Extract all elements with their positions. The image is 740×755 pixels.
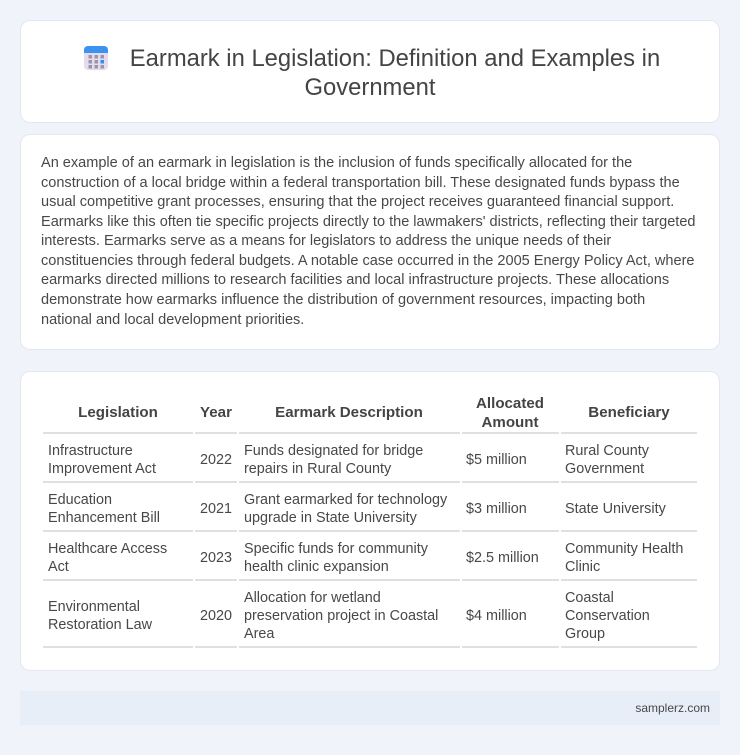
intro paragraph: interests. Earmarks serve as a means for legislators to address the unique needs of their (41, 233, 611, 249)
table row: Education Enhancement Bill: Enhancement Bill (48, 510, 160, 526)
intro paragraph: earmarks directed millions to research facilities and local infrastructure projects. These allocations (41, 272, 669, 288)
intro paragraph: demonstrate how earmarks influence the distribution of government resources, impacting both (41, 292, 645, 308)
table header row: Legislation (78, 404, 158, 421)
table row: Environmental Restoration Law: Restoration Law (48, 617, 152, 633)
panel: intro text card (20, 134, 720, 350)
table row: Environmental Restoration Law (43, 590, 697, 648)
table row: Infrastructure Improvement Act: $5 million (466, 452, 527, 468)
intro paragraph: constituencies through federal budgets. A notable case occurred in the 2005 Energy Policy Act, where (41, 252, 695, 268)
intro paragraph (41, 155, 696, 328)
table header row: Beneficiary (588, 404, 670, 421)
table row: Infrastructure Improvement Act: Improvement Act (48, 461, 156, 477)
table row: Infrastructure Improvement Act: Infrastructure (48, 443, 133, 459)
table row: Environmental Restoration Law: Area (244, 626, 274, 642)
table header row (43, 395, 697, 434)
table row: Environmental Restoration Law: Conservation (565, 608, 650, 624)
table row: Infrastructure Improvement Act (43, 443, 697, 483)
footer bar (20, 691, 720, 725)
table row: Environmental Restoration Law: preservation project in Coastal (244, 608, 438, 624)
table header row: Allocated (476, 395, 544, 412)
table row: Environmental Restoration Law: 2020 (200, 608, 232, 624)
table row: Environmental Restoration Law: Environmental (48, 599, 140, 615)
footer text: samplerz.com: samplerz.com (635, 701, 710, 715)
table row: Infrastructure Improvement Act: Funds designated for bridge (244, 443, 423, 459)
title (130, 45, 660, 101)
table row: Education Enhancement Bill: State University (565, 501, 666, 517)
table row: Education Enhancement Bill: upgrade in State University (244, 510, 417, 526)
table row: Environmental Restoration Law: Group (565, 626, 605, 642)
intro paragraph: usual competitive grant processes, ensuring that the project receives guaranteed financial support. (41, 194, 674, 210)
table row: Healthcare Access Act: $2.5 million (466, 550, 539, 566)
table row: Healthcare Access Act: Healthcare Access (48, 541, 167, 557)
table row: Healthcare Access Act (43, 541, 697, 581)
table row: Healthcare Access Act: 2023 (200, 550, 232, 566)
table row: Education Enhancement Bill: 2021 (200, 501, 232, 517)
title: Earmark in Legislation: Definition and Examples in (130, 45, 660, 72)
table row: Healthcare Access Act: Act (48, 559, 69, 575)
table row: Education Enhancement Bill (43, 492, 697, 532)
table row: Infrastructure Improvement Act: 2022 (200, 452, 232, 468)
intro paragraph: An example of an earmark in legislation is the inclusion of funds specifically allocated for the (41, 155, 632, 171)
table row: Healthcare Access Act: Specific funds for community (244, 541, 428, 557)
title: Government (305, 74, 435, 101)
table row: Healthcare Access Act: Community Health (565, 541, 683, 557)
intro paragraph: Earmarks like this often tie specific projects directly to the lawmakers' districts, reflecting their targeted (41, 214, 696, 230)
table row: Environmental Restoration Law: Allocation for wetland (244, 590, 381, 606)
table row: Environmental Restoration Law: Coastal (565, 590, 614, 606)
icon: calendar (84, 46, 108, 70)
table row: Infrastructure Improvement Act: Rural County (565, 443, 649, 459)
table header row: Earmark Description (275, 404, 423, 421)
panel: table card (20, 371, 720, 671)
table row: Healthcare Access Act: Clinic (565, 559, 600, 575)
intro paragraph: national and local development priorities. (41, 312, 304, 328)
table row: Education Enhancement Bill: Grant earmarked for technology (244, 492, 447, 508)
table row: Infrastructure Improvement Act: repairs in Rural County (244, 461, 391, 477)
table header row: Year (200, 404, 232, 421)
table row: Education Enhancement Bill: $3 million (466, 501, 527, 517)
table row: Infrastructure Improvement Act: Government (565, 461, 644, 477)
table row: Environmental Restoration Law: $4 million (466, 608, 527, 624)
intro paragraph: construction of a local bridge within a federal transportation bill. These designated funds bypass the (41, 174, 680, 190)
panel: title card (20, 20, 720, 123)
table header row: Amount (481, 414, 539, 431)
table row: Education Enhancement Bill: Education (48, 492, 112, 508)
table row: Healthcare Access Act: health clinic expansion (244, 559, 389, 575)
